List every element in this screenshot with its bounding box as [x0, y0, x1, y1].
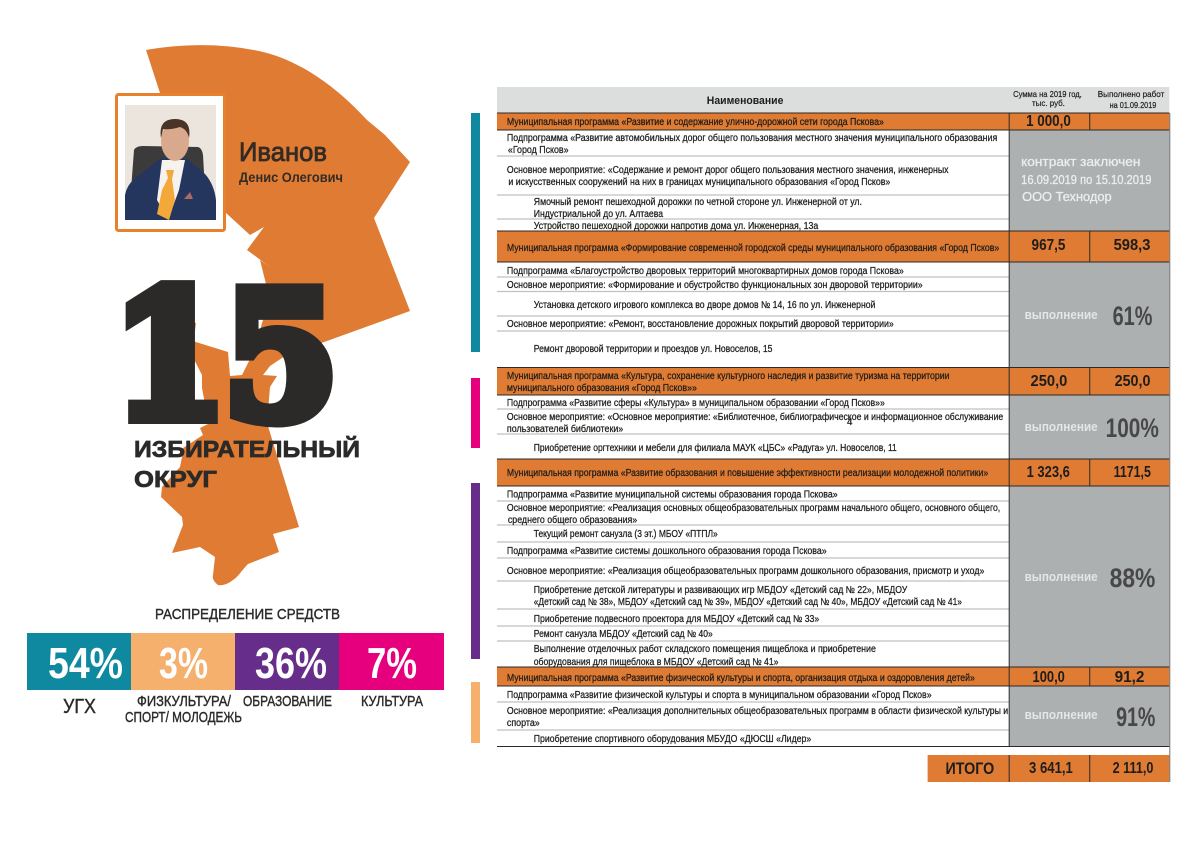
table header: Выполнено работ [1098, 89, 1164, 99]
programme 4: education: Основное мероприятие: «Реализация общеобразовательных программ дошкольного образования, присмотр и уход» [507, 566, 985, 577]
distribution labels [63, 693, 423, 726]
distribution bar: 3% [159, 639, 208, 688]
distribution bar [27, 633, 444, 690]
big number 15: 1 [112, 254, 228, 459]
programme 4: education: выполнение [1025, 569, 1098, 584]
total row: 2 111,0 [1113, 760, 1154, 777]
programme 2: urban environment: Установка детского игрового комплекса во дворе домов № 14, 16 по ул. Инженерной [534, 300, 875, 311]
programme 3: culture: Подпрограмма «Развитие сферы «Культура» в муниципальном образовании «Город Псков»» [507, 398, 885, 409]
programme 2: urban environment: Подпрограмма «Благоустройство дворовых территорий многоквартирных домов города Пскова» [507, 266, 904, 277]
district label: ОКРУГ [134, 466, 217, 492]
programme 1: roads: Основное мероприятие: «Содержание и ремонт дорог общего пользования местного значения, инженерных [507, 165, 949, 176]
programme 3: culture: Приобретение оргтехники и мебели для филиала МАУК «ЦБС» «Радуга» ул. Новоселов, 11 [534, 443, 897, 454]
total row: 3 641,1 [1029, 760, 1073, 777]
programme 1: roads: и искусственных сооружений на них в границах муниципального образования «Город Псков» [508, 177, 891, 188]
programme 4: education: «Детский сад № 38», МБДОУ «Детский сад № 39», МБДОУ «Детский сад № 40», МБДОУ «Детский сад № 41» [534, 597, 962, 608]
programme 3: culture: 100% [1106, 413, 1159, 443]
programme 4: education: 1 323,6 [1027, 464, 1070, 481]
distribution bar: 7% [367, 639, 417, 688]
total row: ИТОГО [946, 759, 994, 778]
total row [946, 759, 1154, 778]
programme 4: education: Текущий ремонт санузла (3 эт.) МБОУ «ПТПЛ» [534, 529, 718, 540]
programme 3: culture: выполнение [1025, 419, 1098, 434]
programme 1: roads: Ямочный ремонт пешеходной дорожки по четной стороне ул. Инженерной от ул. [534, 197, 862, 208]
programme 3: culture: муниципального образования «Город Псков»» [507, 383, 697, 394]
programme 1: roads: 1 000,0 [1026, 113, 1071, 130]
programme 4: education: Подпрограмма «Развитие муниципальной системы образования города Пскова» [507, 489, 838, 501]
programme 2: urban environment: 61% [1113, 301, 1152, 331]
programme 4: education: среднего общего образования» [508, 515, 638, 526]
programme 2: urban environment: 598,3 [1114, 237, 1151, 254]
programme 1: roads: Индустриальной до ул. Алтаева [534, 209, 664, 220]
table header: на 01.09.2019 [1110, 100, 1157, 110]
distribution labels: УГХ [63, 696, 96, 718]
distribution labels: ОБРАЗОВАНИЕ [243, 693, 332, 710]
photo frame [116, 94, 224, 230]
programme 3: culture: Основное мероприятие: «Основное мероприятие: «Библиотечное, библиографическое и информационное обслуживание [507, 412, 1003, 423]
programme 5: sport [507, 669, 1155, 745]
programme 1: roads: 16.09.2019 по 15.10.2019 [1021, 172, 1151, 187]
grey status column [1009, 130, 1169, 747]
programme 2: urban environment [507, 237, 1152, 355]
programme 2: urban environment: Ремонт дворовой территории и проездов ул. Новоселов, 15 [534, 344, 773, 355]
programme 4: education: 1171,5 [1114, 464, 1151, 481]
distribution labels: СПОРТ/ МОЛОДЕЖЬ [125, 709, 242, 726]
programme 1: roads: Муниципальная программа «Развитие и содержание улично-дорожной сети города Пскова» [507, 117, 884, 128]
programme 1: roads: Подпрограмма «Развитие автомобильных дорог общего пользования местного значения муниципального образования [507, 133, 997, 144]
programme 5: sport: Основное мероприятие: «Реализация дополнительных общеобразовательных программ в области физической культуры и [507, 706, 1008, 717]
heading: funds distribution: РАСПРЕДЕЛЕНИЕ СРЕДСТВ [155, 606, 340, 623]
big number 15: 5 [223, 255, 339, 460]
programme 4: education: Ремонт санузла МБДОУ «Детский сад № 40» [534, 629, 713, 640]
programme 4: education: Основное мероприятие: «Реализация основных общеобразовательных программ начального общего, основного общего, [507, 503, 1000, 514]
programme 3: culture: 250,0 [1115, 373, 1151, 390]
distribution labels: ФИЗКУЛЬТУРА/ [137, 693, 232, 710]
programme 3: culture: 4 [847, 417, 853, 428]
distribution bar: 36% [255, 639, 327, 688]
programme 5: sport: выполнение [1025, 707, 1098, 722]
programme 3: culture: 250,0 [1031, 373, 1067, 390]
programme 1: roads: Устройство пешеходной дорожки напротив дома ул. Инженерная, 13а [534, 221, 819, 232]
table header [497, 87, 1169, 113]
programme 2: urban environment: 967,5 [1032, 237, 1065, 254]
district label [134, 435, 360, 492]
row lines [497, 156, 1009, 730]
programme 5: sport: 91,2 [1115, 669, 1145, 686]
table header: Сумма на 2019 год, [1013, 89, 1082, 99]
district label: ИЗБИРАТЕЛЬНЫЙ [134, 435, 360, 462]
programme 4: education: оборудования для пищеблока в МБДОУ «Детский сад № 41» [534, 657, 779, 668]
programme 5: sport: Приобретение спортивного оборудования МБУДО «ДЮСШ «Лидер» [534, 734, 812, 745]
programme 3: culture: Муниципальная программа «Культура, сохранение культурного наследия и развитие туризма на территории [507, 371, 950, 382]
programme 5: sport: 91% [1116, 702, 1155, 732]
programme 4: education: Приобретение подвесного проектора для МБДОУ «Детский сад № 33» [534, 614, 820, 625]
programme 1: roads: «Город Псков» [508, 145, 569, 156]
programme 5: sport: Муниципальная программа «Развитие физической культуры и спорта, организация отдыха и оздоровления детей» [507, 673, 975, 684]
table header: тыс. руб. [1032, 98, 1065, 108]
programme 1: roads [507, 113, 1151, 232]
portrait photo [125, 105, 216, 220]
deputy name [239, 137, 343, 185]
programme 4: education: Приобретение детской литературы и развивающих игр МБДОУ «Детский сад № 22», МБДОУ [534, 585, 908, 596]
programme 2: urban environment: выполнение [1025, 307, 1098, 322]
big number 15 [112, 254, 339, 460]
orange programme rows [497, 113, 1169, 782]
programme 4: education: 88% [1110, 563, 1155, 593]
distribution bar: 54% [48, 639, 123, 688]
programme 1: roads: ООО Технодор [1022, 189, 1112, 204]
programme 4: education: Муниципальная программа «Развитие образования и повышение эффективности реализации молодежной политики» [507, 468, 989, 479]
programme 2: urban environment: Муниципальная программа «Формирование современной городской среды муниципального образования «Город Псков» [507, 243, 1000, 254]
programme 3: culture [507, 371, 1159, 454]
programme 4: education: Выполнение отделочных работ складского помещения пищеблока и приобретение [534, 644, 876, 655]
programme 1: roads: контракт заключен [1021, 154, 1140, 169]
programme 4: education [507, 464, 1155, 668]
deputy name: Денис Олегович [239, 169, 343, 185]
programme 3: culture: пользователей библиотеки» [507, 424, 624, 435]
programme 5: sport: спорта» [507, 718, 540, 729]
programme 2: urban environment: Основное мероприятие: «Ремонт, восстановление дорожных покрытий дворовой территории» [507, 319, 894, 330]
map of electoral district [146, 45, 410, 585]
deputy name: Иванов [239, 137, 327, 167]
programme 4: education: Подпрограмма «Развитие системы дошкольного образования города Пскова» [507, 546, 827, 557]
programme 5: sport: Подпрограмма «Развитие физической культуры и спорта в муниципальном образовании «Город Псков» [507, 690, 932, 701]
table header: Наименование [707, 95, 783, 107]
programme 5: sport: 100,0 [1033, 669, 1065, 686]
programme 2: urban environment: Основное мероприятие: «Формирование и обустройство функциональных зон дворовой территории» [507, 280, 923, 291]
distribution labels: КУЛЬТУРА [361, 693, 423, 710]
budget table [497, 87, 1170, 782]
colour markers beside table [471, 113, 480, 743]
